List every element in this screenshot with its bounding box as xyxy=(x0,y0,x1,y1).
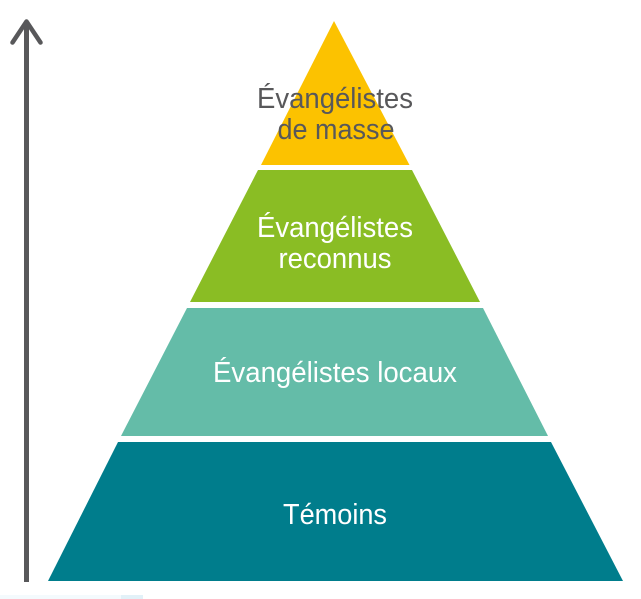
pyramid level: Témoins: Témoins xyxy=(283,499,387,531)
faint strip at bottom edge xyxy=(0,595,143,599)
pyramid level: Évangélistes reconnus: Évangélistes xyxy=(257,211,413,244)
icon: upward arrow xyxy=(12,22,40,582)
pyramid level: Évangélistes locaux xyxy=(121,308,548,436)
pyramid level: Évangélistes de masse xyxy=(257,21,413,165)
pyramid level: Évangélistes de masse: Évangélistes xyxy=(257,82,413,115)
pyramid level: Évangélistes reconnus: reconnus xyxy=(278,243,392,275)
pyramid level: Évangélistes de masse: de masse xyxy=(278,114,394,146)
pyramid level: Évangélistes locaux: Évangélistes locaux xyxy=(213,356,457,389)
pyramid level: Évangélistes reconnus xyxy=(190,170,480,302)
pyramid level: Témoins xyxy=(48,442,623,581)
